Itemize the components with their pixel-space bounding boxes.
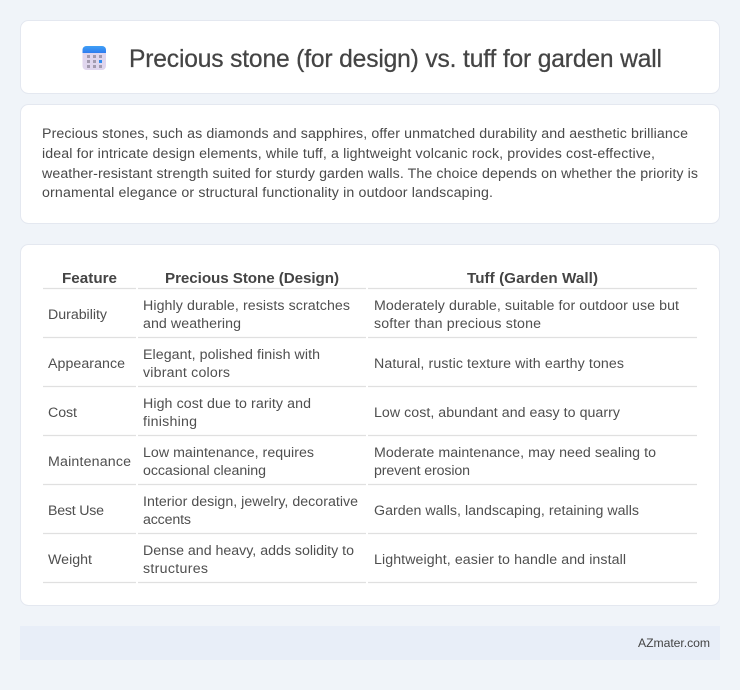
row: weight: structures [143,561,208,577]
row: weight: Weight [48,552,92,568]
row: durability: Highly durable, resists scratches [143,298,350,314]
row: cost [48,396,621,430]
row: weight: Dense and heavy, adds solidity to [143,543,354,559]
row: cost: Low cost, abundant and easy to quarry [374,405,621,421]
table header [62,270,598,287]
row: best use [48,494,639,528]
footer [20,626,720,660]
row: maintenance: occasional cleaning [143,463,266,479]
row: best use: accents [143,512,191,528]
row: appearance [48,347,624,381]
row: durability: Moderately durable, suitable for outdoor use but [374,298,679,314]
text block: summary [41,126,698,201]
row: best use: Garden walls, landscaping, retaining walls [374,503,639,519]
row: appearance: Appearance [48,356,125,372]
row: cost: finishing [143,414,197,430]
text block: summary: ornamental elegance or structural functionality in outdoor landscaping. [42,185,493,201]
row: cost: Cost [48,405,77,421]
heading: Precious stone (for design) vs. tuff for garden wall [129,46,662,73]
row: maintenance: Moderate maintenance, may need sealing to [374,445,656,461]
row: appearance: Elegant, polished finish with [143,347,320,363]
panel: comparison table [20,244,720,606]
row: cost: High cost due to rarity and [143,396,311,412]
row: appearance: vibrant colors [143,365,230,381]
row: durability: Durability [48,307,108,323]
table header: Precious Stone (Design) [165,270,339,287]
panel: title [20,20,720,94]
row: best use: Best Use [48,503,104,519]
row: durability: softer than precious stone [374,316,541,332]
icon: calendar [82,46,106,70]
text block: summary: ideal for intricate design elements, while tuff, a lightweight volcanic rock, provides cost-effective, [42,146,655,162]
panel: summary [20,104,720,224]
row: durability: and weathering [143,316,241,332]
row: weight [48,543,626,577]
row: durability [48,298,679,332]
row: maintenance [48,445,656,479]
table header: Tuff (Garden Wall) [467,270,598,287]
footer credit: AZmater.com [638,636,710,650]
row: best use: Interior design, jewelry, decorative [143,494,358,510]
row: maintenance: prevent erosion [374,463,470,479]
row: appearance: Natural, rustic texture with earthy tones [374,356,624,372]
table header: Feature [62,270,117,287]
row: weight: Lightweight, easier to handle and install [374,552,626,568]
text block: summary: weather-resistant strength suited for sturdy garden walls. The choice depends on whether the priority is [41,166,698,182]
row: maintenance: Maintenance [48,454,131,470]
text block: summary: Precious stones, such as diamonds and sapphires, offer unmatched durability and aesthetic brilliance [42,126,688,142]
row: maintenance: Low maintenance, requires [143,445,314,461]
